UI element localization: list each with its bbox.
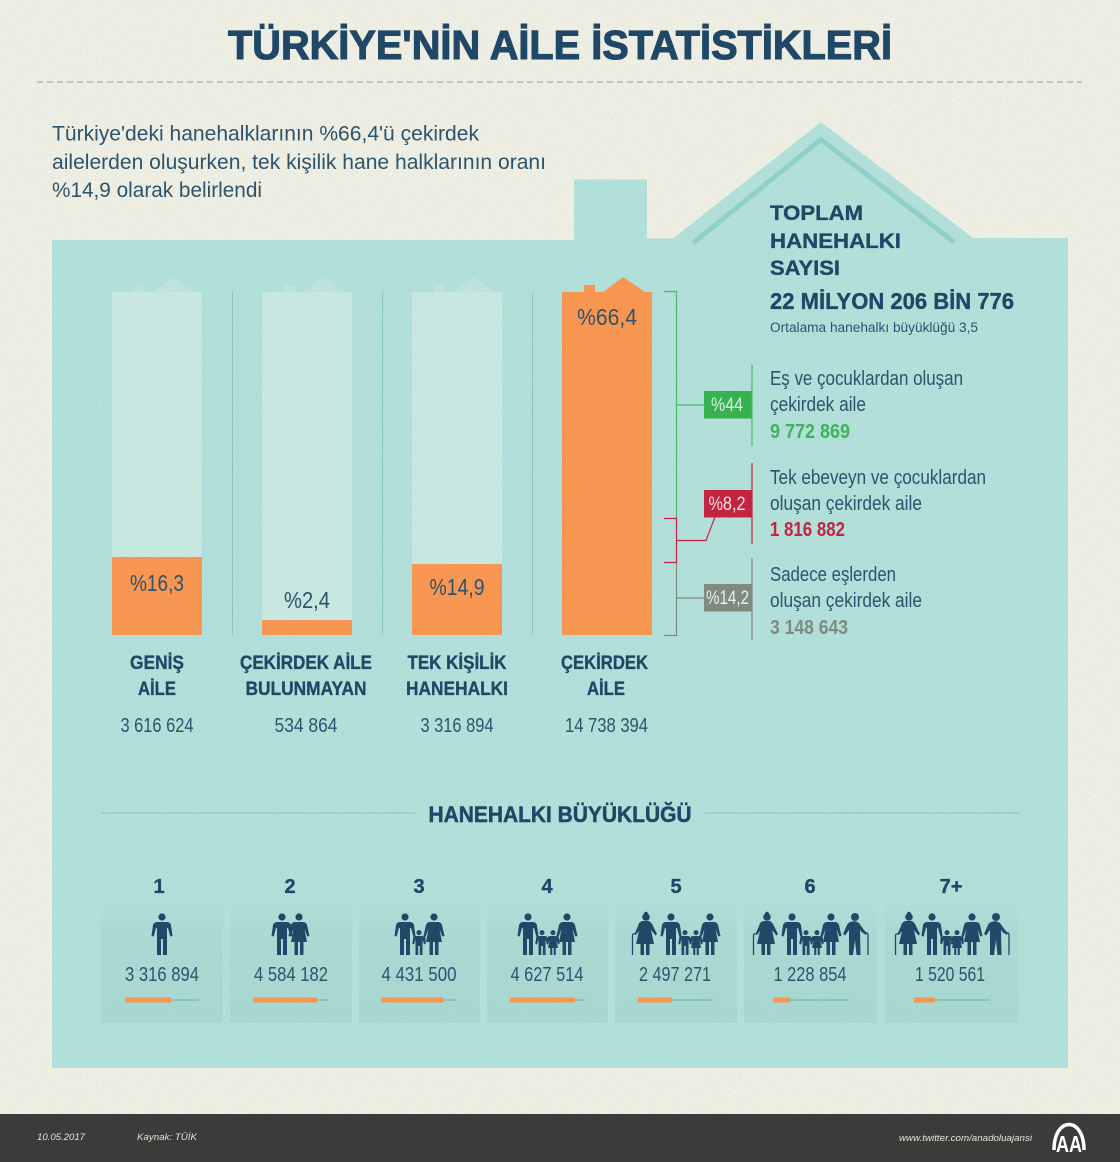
household size 1: 3 316 894 [125, 964, 199, 986]
total households block: SAYISI [770, 257, 840, 280]
category label: cekirdek aile bulunmayan: BULUNMAYAN [246, 678, 366, 700]
bar: cekirdek aile [562, 277, 652, 635]
bar: tek kisilik hanehalki [412, 277, 502, 635]
household size 2: 4 584 182 [254, 964, 328, 986]
household size 6: 6 [804, 876, 816, 898]
intro text [52, 122, 546, 202]
household size 7+: 7+ [940, 876, 962, 898]
intro text: %14,9 olarak belirlendi [52, 178, 262, 202]
intro text: Türkiye'deki hanehalklarının %66,4'ü çekirdek [52, 122, 479, 146]
intro text: ailelerden oluşurken, tek kişilik hane halklarının oranı [52, 150, 546, 174]
household size 1: 1 [153, 876, 165, 898]
footer bar: Kaynak: TÜİK [137, 1132, 198, 1143]
title: TÜRKİYE'NİN AİLE İSTATİSTİKLERİ [228, 22, 892, 68]
badge and text: couple only: 3 148 643 [770, 617, 848, 639]
badge and text: couple only: Sadece eşlerden [770, 564, 896, 586]
household size 5: 5 [670, 876, 682, 898]
category label: cekirdek aile bulunmayan: ÇEKİRDEK AİLE [240, 651, 372, 674]
household size 7+: 1 520 561 [915, 964, 985, 986]
household size 4 [487, 876, 608, 1023]
footer bar: 10.05.2017 [37, 1132, 86, 1142]
category label: cekirdek aile: 14 738 394 [565, 715, 648, 737]
bar: cekirdek aile: %66,4 [577, 304, 637, 330]
household size 5: 2 497 271 [639, 964, 711, 986]
household size 2: 2 [284, 876, 296, 898]
category label: cekirdek aile bulunmayan [240, 651, 372, 737]
category label: tek kisilik hanehalki [406, 651, 508, 737]
badge and text: single parent: %8,2 [708, 494, 746, 515]
total households block: Ortalama hanehalkı büyüklüğü 3,5 [770, 320, 978, 335]
category label: tek kisilik hanehalki: 3 316 894 [420, 715, 494, 737]
category label: genis aile: AİLE [138, 677, 176, 700]
badge and text: couple with children [704, 365, 963, 446]
house panel [52, 122, 1068, 1068]
section heading: HANEHALKI BÜYÜKLÜĞÜ [428, 802, 692, 827]
total households block [770, 202, 1014, 335]
badge and text: single parent: Tek ebeveyn ve çocuklardan [770, 467, 986, 489]
bar: tek kisilik hanehalki: %14,9 [430, 574, 484, 600]
icon: six people [754, 912, 868, 955]
badge and text: couple only: %14,2 [706, 588, 749, 609]
badge and text: couple only: oluşan çekirdek aile [770, 590, 922, 612]
category label: tek kisilik hanehalki: TEK KİŞİLİK [408, 651, 506, 674]
household size 6: 1 228 854 [774, 964, 846, 986]
icon: five people [632, 912, 720, 955]
total households block: TOPLAM [770, 202, 863, 225]
total households block: HANEHALKI [770, 230, 901, 253]
badge and text: single parent: 1 816 882 [770, 519, 845, 541]
household size 2 [230, 876, 352, 1023]
category label: cekirdek aile [561, 651, 648, 737]
category label: cekirdek aile: AİLE [587, 677, 625, 700]
badge and text: couple with children: çekirdek aile [770, 394, 866, 416]
icon: agency logo: AA [1056, 1131, 1082, 1157]
footer bar [0, 1114, 1120, 1162]
household size 3 [359, 876, 480, 1023]
category label: cekirdek aile: ÇEKİRDEK [561, 651, 648, 674]
icon: seven or more people [896, 912, 1009, 955]
icon: one person [152, 913, 172, 955]
household size 7+ [885, 876, 1018, 1023]
bar: cekirdek aile bulunmayan: %2,4 [284, 587, 330, 613]
badge and text: couple with children: 9 772 869 [770, 421, 850, 443]
bar: genis aile [112, 277, 202, 635]
bar: genis aile: %16,3 [130, 570, 184, 596]
category label: tek kisilik hanehalki: HANEHALKI [406, 678, 508, 700]
footer bar: www.twitter.com/anadoluajansi [899, 1133, 1033, 1144]
household size 3: 3 [413, 876, 425, 898]
category label: genis aile: GENİŞ [130, 651, 184, 674]
household size 5 [615, 876, 737, 1023]
icon: four people [518, 913, 578, 955]
badge and text: couple with children: %44 [711, 395, 743, 416]
badge and text: single parent: oluşan çekirdek aile [770, 493, 922, 515]
total households block: 22 MİLYON 206 BİN 776 [770, 288, 1014, 314]
category label: genis aile: 3 616 624 [120, 715, 194, 737]
icon: three people [394, 913, 444, 955]
badge and text: couple only [704, 558, 922, 640]
household size 4: 4 [541, 876, 553, 898]
household size 1 [101, 876, 223, 1023]
nuclear family bracket [664, 292, 715, 636]
household size 3: 4 431 500 [382, 964, 456, 986]
category label: genis aile [120, 651, 194, 737]
household size 6 [744, 876, 877, 1023]
icon: agency logo [1054, 1124, 1084, 1157]
badge and text: couple with children: Eş ve çocuklardan oluşan [770, 368, 963, 390]
household size 4: 4 627 514 [510, 964, 584, 986]
badge and text: single parent [704, 463, 986, 544]
bar: cekirdek aile bulunmayan [262, 277, 352, 635]
icon: two people [272, 913, 310, 955]
category label: cekirdek aile bulunmayan: 534 864 [274, 715, 338, 737]
